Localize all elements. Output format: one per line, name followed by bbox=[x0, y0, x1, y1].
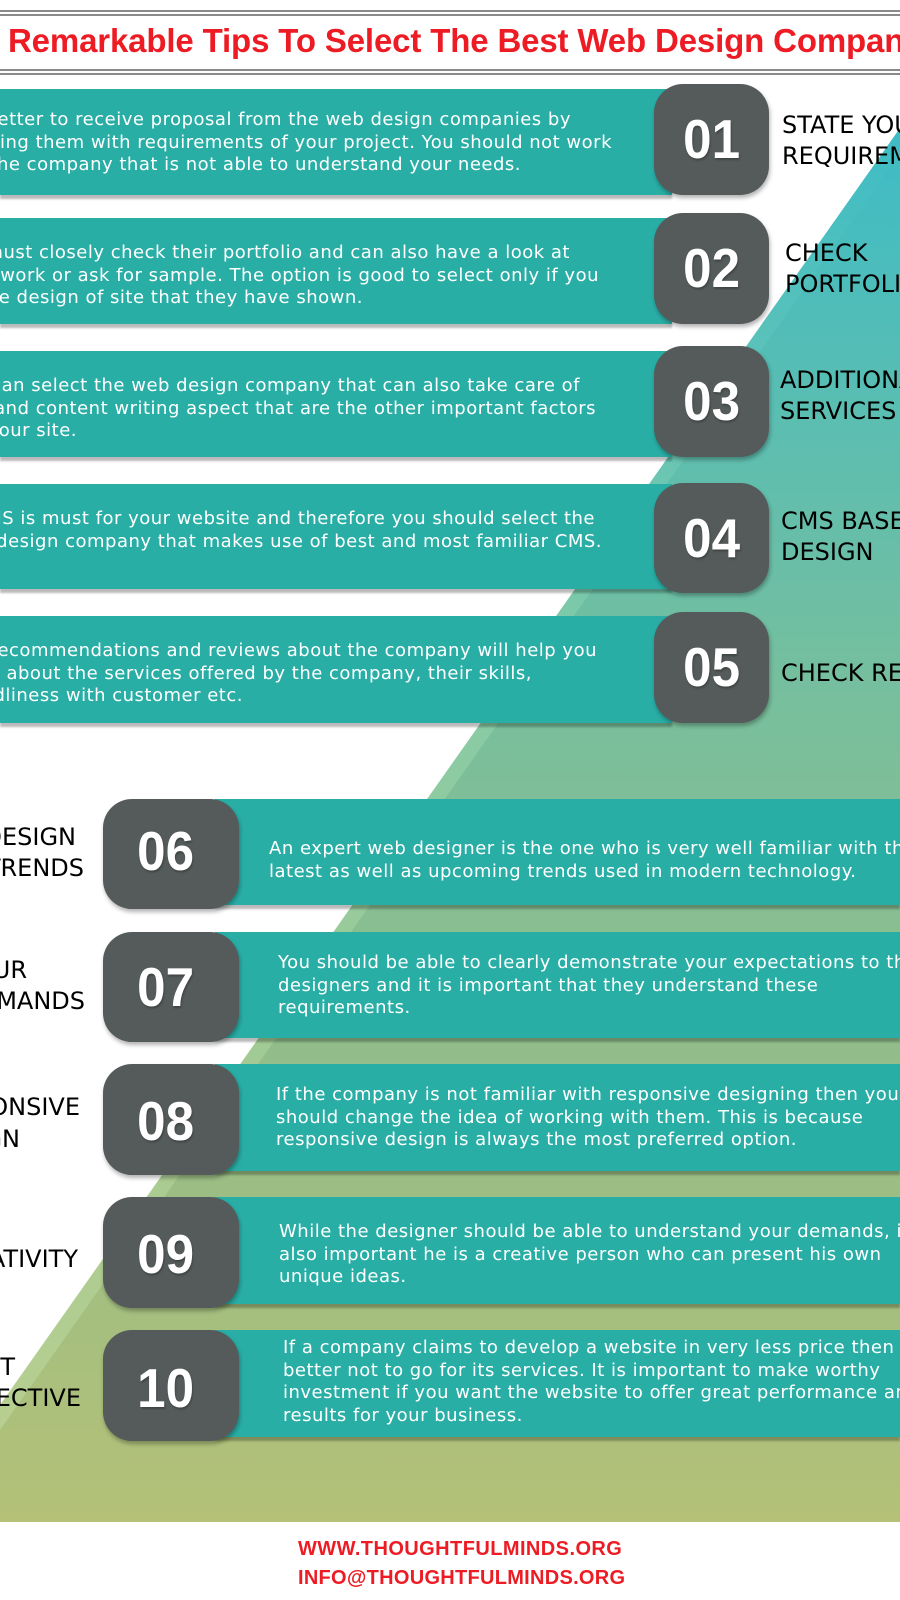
footer contact: INFO@THOUGHTFULMINDS.ORG bbox=[298, 1566, 625, 1588]
tip 06 badge: 06 bbox=[138, 820, 194, 882]
tip 01 badge bbox=[654, 84, 769, 195]
tip 07 text: You should be able to clearly demonstrate your expectations to the bbox=[278, 952, 900, 973]
panel: tip 05 bbox=[0, 612, 900, 728]
tip 03 badge: 03 bbox=[683, 370, 740, 432]
tip 08 text: should change the idea of working with them. This is because bbox=[276, 1107, 863, 1128]
tip 08 text: responsive design is always the most preferred option. bbox=[276, 1129, 797, 1150]
tip 10 badge bbox=[103, 1330, 239, 1441]
tip 07 text: designers and it is important that they understand these bbox=[278, 975, 818, 996]
tip 04 badge: 04 bbox=[683, 507, 740, 569]
tip 01 badge: 01 bbox=[683, 108, 740, 170]
tip 10 label bbox=[0, 1353, 81, 1412]
tip 10 text: results for your business. bbox=[283, 1405, 523, 1426]
tip 08 badge: 08 bbox=[138, 1090, 194, 1152]
tip 04 label bbox=[781, 507, 900, 566]
tip 10 text: If a company claims to develop a website in very less price then bbox=[283, 1337, 894, 1358]
tip 05 badge: 05 bbox=[683, 636, 740, 698]
panel: tip 08 bbox=[0, 1064, 900, 1180]
title: Remarkable Tips To Select The Best Web Design Company bbox=[8, 22, 900, 59]
tip 09 text: unique ideas. bbox=[279, 1266, 407, 1287]
tip 06 label bbox=[0, 823, 84, 882]
panel: tip 06 bbox=[0, 799, 900, 914]
tip 02 label bbox=[785, 239, 900, 298]
panel: tip 09 bbox=[0, 1197, 900, 1314]
tip 04 badge bbox=[654, 483, 769, 593]
tip 04 label: DESIGN bbox=[781, 538, 874, 566]
tip 03 label bbox=[780, 366, 900, 424]
tip 01 text bbox=[0, 109, 612, 175]
tip 06 text: latest as well as upcoming trends used in modern technology. bbox=[269, 861, 857, 882]
tip 03 badge bbox=[654, 346, 769, 457]
panel: tip 10 bbox=[0, 1330, 900, 1446]
tip 06 text bbox=[269, 838, 900, 882]
panel: tip 01 bbox=[0, 84, 900, 200]
tip 06 badge bbox=[103, 799, 239, 909]
tip 08 badge bbox=[103, 1064, 239, 1175]
tip 05 text bbox=[0, 640, 597, 706]
tip 07 badge: 07 bbox=[138, 956, 194, 1018]
tip 05 badge bbox=[654, 612, 769, 723]
tip 07 text: requirements. bbox=[278, 997, 411, 1018]
tip 02 badge: 02 bbox=[683, 237, 740, 299]
tip 07 label bbox=[0, 956, 85, 1015]
tip 02 badge bbox=[654, 213, 769, 324]
tip 09 text bbox=[279, 1221, 900, 1287]
title rule lines bbox=[0, 10, 900, 75]
tip 04 text bbox=[0, 508, 602, 552]
footer contact: WWW.THOUGHTFULMINDS.ORG bbox=[298, 1538, 622, 1560]
tip 07 text bbox=[278, 952, 900, 1018]
tip 09 badge: 09 bbox=[138, 1223, 194, 1285]
tip 02 label: CHECK bbox=[785, 239, 867, 267]
tip 03 text bbox=[0, 375, 596, 441]
tip 10 text bbox=[283, 1337, 900, 1426]
tip 10 badge: 10 bbox=[138, 1357, 194, 1419]
tip 02 text bbox=[0, 242, 599, 308]
panel: tip 02 bbox=[0, 213, 900, 330]
tip 09 text: also important he is a creative person who can present his own bbox=[279, 1244, 882, 1265]
tip 09 badge bbox=[103, 1197, 239, 1308]
panel: tip 07 bbox=[0, 932, 900, 1048]
footer contact bbox=[298, 1538, 625, 1588]
tip 07 badge bbox=[103, 932, 239, 1042]
panel: tip 03 bbox=[0, 346, 900, 462]
tip 06 text: An expert web designer is the one who is very well familiar with the bbox=[269, 838, 900, 859]
tip 08 text: If the company is not familiar with responsive designing then you bbox=[276, 1084, 899, 1105]
panel: tip 04 bbox=[0, 483, 900, 598]
tip 01 label bbox=[782, 111, 900, 170]
tip 03 label: SERVICES bbox=[780, 396, 896, 424]
tip 10 text: better not to go for its services. It is important to make worthy bbox=[283, 1360, 880, 1381]
tip 08 label bbox=[0, 1093, 80, 1153]
tip 08 text bbox=[276, 1084, 899, 1150]
